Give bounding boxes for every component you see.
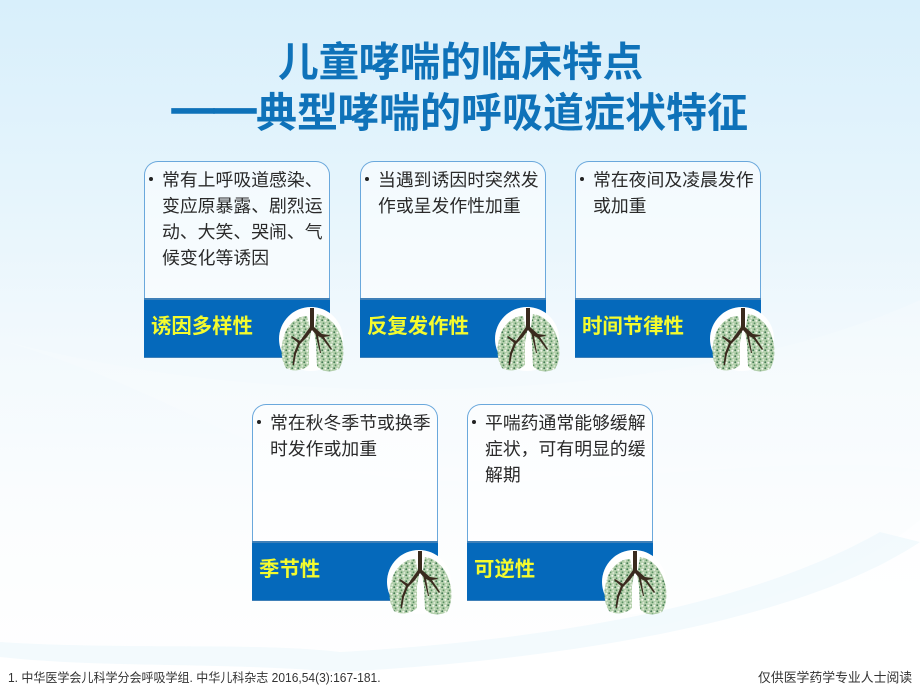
title bbox=[171, 39, 748, 136]
reference footnote: 1. 中华医学会儿科学分会呼吸学组. 中华儿科杂志 2016,54(3):167-181. bbox=[8, 671, 381, 685]
text block: 常在秋冬季节或换季 bbox=[270, 413, 431, 433]
heading band: 诱因多样性 bbox=[151, 316, 253, 338]
bullet bbox=[365, 177, 369, 181]
text block: 当遇到诱因时突然发 bbox=[378, 170, 539, 190]
bullet bbox=[472, 420, 476, 424]
heading band: 季节性 bbox=[259, 559, 320, 581]
card body bbox=[144, 161, 330, 312]
card body bbox=[467, 404, 653, 555]
panel: 季节性 bbox=[252, 404, 452, 614]
text block bbox=[162, 170, 323, 268]
panel: 诱因多样性 bbox=[144, 161, 344, 372]
text block: 平喘药通常能够缓解 bbox=[485, 413, 646, 433]
text block bbox=[270, 413, 431, 459]
icon: lungs bbox=[602, 550, 666, 614]
panel: 反复发作性 bbox=[360, 161, 560, 372]
icon: lungs bbox=[387, 550, 452, 614]
heading band bbox=[575, 298, 761, 358]
panel: 时间节律性 bbox=[575, 161, 774, 372]
panel: 可逆性 bbox=[467, 404, 666, 614]
text block: 常有上呼吸道感染、 bbox=[162, 170, 323, 190]
text block: 或加重 bbox=[593, 196, 647, 216]
icon: lungs bbox=[279, 307, 344, 372]
heading band: 时间节律性 bbox=[582, 316, 684, 338]
icon: lungs bbox=[495, 307, 560, 372]
text block: 作或呈发作性加重 bbox=[378, 196, 521, 216]
title line 1: 儿童哮喘的临床特点 bbox=[278, 39, 643, 85]
text block bbox=[378, 170, 539, 216]
heading band bbox=[467, 541, 653, 601]
heading band bbox=[144, 298, 330, 358]
text block: 时发作或加重 bbox=[270, 439, 377, 459]
title line 2: 典型哮喘的呼吸道症状特征 bbox=[256, 90, 748, 136]
text block: 常在夜间及凌晨发作 bbox=[593, 170, 754, 190]
disclaimer: 仅供医学药学专业人士阅读 bbox=[758, 670, 912, 685]
text block: 解期 bbox=[485, 465, 521, 485]
heading band: 反复发作性 bbox=[367, 316, 469, 338]
bullet bbox=[580, 177, 584, 181]
icon: lungs bbox=[710, 307, 774, 372]
text block: 症状，可有明显的缓 bbox=[485, 439, 646, 459]
card body bbox=[252, 404, 438, 555]
text block bbox=[593, 170, 754, 216]
text block: 候变化等诱因 bbox=[162, 248, 269, 268]
heading band bbox=[360, 298, 546, 358]
heading band bbox=[252, 541, 438, 601]
bullet bbox=[149, 177, 153, 181]
title dash: —— bbox=[172, 84, 256, 131]
card body bbox=[575, 161, 761, 312]
card body bbox=[360, 161, 546, 312]
heading band: 可逆性 bbox=[474, 559, 535, 581]
text block: 动、大笑、哭闹、气 bbox=[162, 222, 323, 242]
text block bbox=[485, 413, 646, 485]
text block: 变应原暴露、剧烈运 bbox=[162, 196, 323, 216]
bullet bbox=[257, 420, 261, 424]
